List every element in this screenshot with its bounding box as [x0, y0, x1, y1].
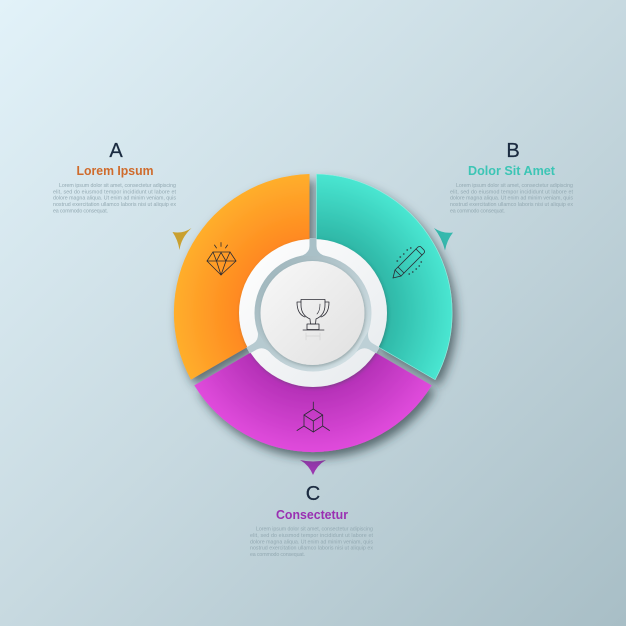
- letter C: C: [306, 483, 320, 505]
- body text C: Lorem ipsum dolor sit amet, consectetur adipiscing: [256, 527, 373, 533]
- body text B: [450, 183, 574, 214]
- body text A: elit, sed do eiusmod tempor incididunt ut labore et: [53, 189, 177, 195]
- body text C: dolore magna aliqua. Ut enim ad minim veniam, quis: [250, 539, 373, 545]
- center disc: [260, 261, 364, 365]
- body text A: ea commodo consequat.: [53, 208, 108, 214]
- body text A: [53, 183, 177, 214]
- body text A: Lorem ipsum dolor sit amet, consectetur adipiscing: [59, 183, 176, 189]
- letter A: A: [109, 140, 123, 162]
- body text C: nostrud exercitation ullamco laboris nisi ut aliquip ex: [250, 546, 373, 552]
- segment A: orange: [174, 174, 310, 380]
- body text B: dolore magna aliqua. Ut enim ad minim veniam, quis: [450, 196, 573, 202]
- body text B: nostrud exercitation ullamco laboris nisi ut aliquip ex: [450, 202, 573, 208]
- icon: cube: [297, 402, 330, 432]
- body text A: nostrud exercitation ullamco laboris nisi ut aliquip ex: [53, 202, 176, 208]
- block B: [450, 140, 574, 214]
- body text C: ea commodo consequat.: [250, 552, 305, 558]
- body text C: elit, sed do eiusmod tempor incididunt ut labore et: [250, 533, 374, 539]
- pointer B: [434, 228, 453, 250]
- block A: [53, 140, 177, 214]
- body text A: dolore magna aliqua. Ut enim ad minim veniam, quis: [53, 196, 176, 202]
- white ring: [239, 239, 387, 387]
- icon: trophy: [297, 300, 329, 340]
- heading C: Consectetur: [276, 507, 348, 522]
- block C: [250, 483, 374, 558]
- letter B: B: [506, 140, 520, 162]
- radial chart: [174, 174, 452, 452]
- body text C: [250, 527, 374, 558]
- body text B: Lorem ipsum dolor sit amet, consectetur adipiscing: [456, 183, 573, 189]
- icon: pencil: [393, 246, 424, 278]
- segment B: teal: [316, 174, 452, 380]
- channel: [242, 238, 384, 372]
- heading A: Lorem Ipsum: [76, 163, 154, 178]
- segment C: purple: [194, 318, 432, 452]
- pointer A: [172, 228, 192, 250]
- body text B: ea commodo consequat.: [450, 208, 505, 214]
- body text B: elit, sed do eiusmod tempor incididunt ut labore et: [450, 189, 574, 195]
- pointer C: [300, 460, 326, 475]
- heading B: Dolor Sit Amet: [468, 163, 556, 178]
- icon: diamond: [207, 242, 236, 275]
